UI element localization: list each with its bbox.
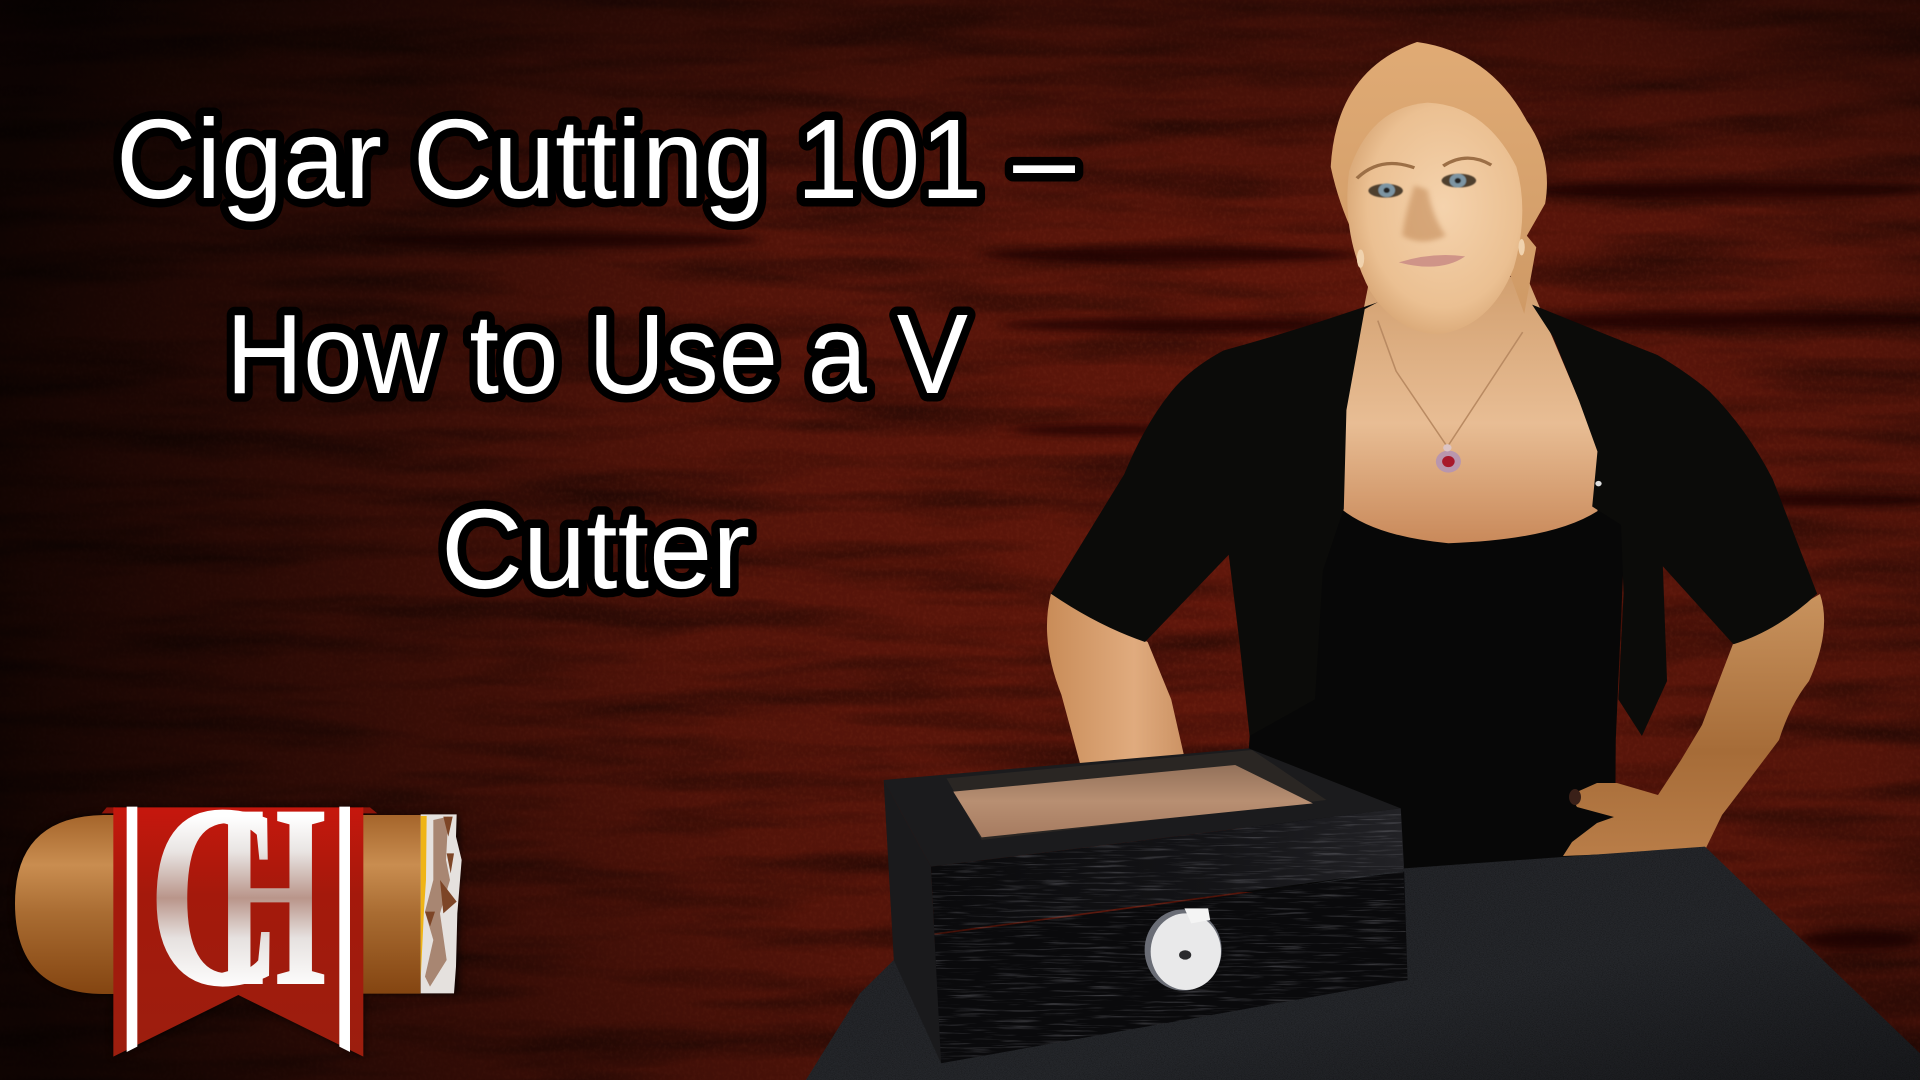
- pendant: [1436, 444, 1461, 473]
- nose shading: [1402, 185, 1446, 241]
- ribbon fold right: [362, 807, 377, 813]
- ribbon stripe left: [127, 807, 137, 1052]
- face: [1347, 103, 1522, 334]
- letter H: H: [213, 749, 327, 1041]
- table: [806, 847, 1920, 1080]
- cigar body: [362, 815, 421, 994]
- title line 2: How to Use a V: [226, 291, 968, 417]
- earrings: [1357, 239, 1525, 268]
- mouth: [1399, 255, 1465, 267]
- box front: [934, 872, 1408, 1063]
- jacket: [1051, 302, 1817, 736]
- title line 1: Cigar Cutting 101 –: [116, 96, 1075, 222]
- interior cedar: [953, 765, 1313, 837]
- title line 3: Cutter: [441, 486, 750, 612]
- box side: [884, 780, 941, 1063]
- necklace: [1378, 321, 1523, 447]
- ribbon fold left: [102, 807, 115, 813]
- right eye: [1442, 174, 1476, 188]
- chest and neck: [1341, 277, 1603, 543]
- humidor box: [884, 748, 1414, 1067]
- person: presenter: [1047, 42, 1824, 892]
- glass window: [947, 750, 1326, 840]
- wood grain: [928, 807, 1414, 1067]
- title: [116, 96, 1075, 612]
- left arm: [1047, 594, 1192, 791]
- hair: [1331, 42, 1547, 314]
- ribbon: [113, 807, 363, 1057]
- logo: cigar with CH ribbon: [15, 749, 462, 1057]
- cigar foot: [421, 814, 462, 993]
- right arm and hand: [1563, 594, 1824, 856]
- lid top: [884, 748, 1401, 867]
- dress: [1239, 502, 1626, 892]
- logo shadow: [15, 808, 458, 1057]
- eyebrows: [1357, 158, 1491, 178]
- lid front: [931, 808, 1404, 933]
- microphone clip: [1595, 481, 1602, 486]
- hygrometer: [1145, 908, 1222, 991]
- letter C: C: [147, 749, 284, 1041]
- cigar head: [15, 815, 115, 994]
- CH monogram: [147, 749, 327, 1041]
- fingernail: [1569, 789, 1581, 805]
- left eye: [1368, 183, 1403, 198]
- upper body: [1051, 42, 1817, 736]
- ribbon stripe right: [339, 807, 350, 1052]
